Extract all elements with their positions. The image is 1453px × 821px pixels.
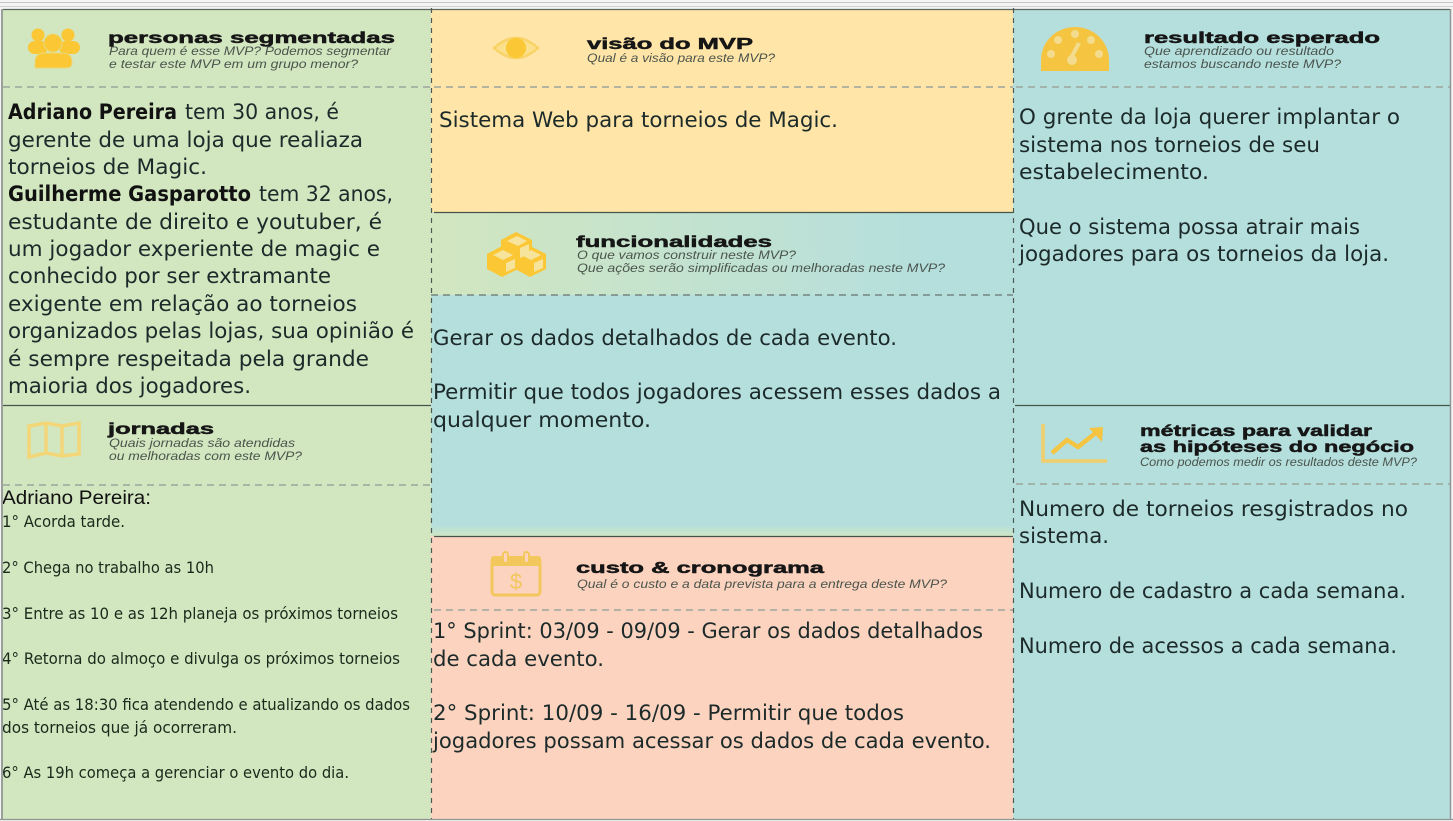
subtitle: resultado: [1144, 46, 1342, 71]
subtitle: resultado: estamos buscando neste MVP?: [1144, 59, 1342, 71]
text block: personas: Guilherme Gasparotto: [8, 182, 251, 206]
panel: personas segmentadas: [3, 9, 431, 405]
text block: personas: conhecido por ser extramante: [8, 264, 331, 288]
text block: personas: estudante de direito e youtuber, é: [8, 210, 382, 234]
text block: personas: organizados pelas lojas, sua opinião é: [8, 319, 414, 343]
subtitle: visão: Qual é a visão para este MVP?: [587, 53, 776, 65]
text block: sprints: [432, 619, 991, 753]
subtitle: funcionalidades: Que ações serão simplificadas ou melhoradas neste MVP?: [577, 263, 946, 275]
text block: resultado: estabelecimento.: [1019, 160, 1209, 184]
icon: eye: [494, 38, 538, 58]
text block: jornada de Adriano Pereira: 3° Entre as 10 e as 12h planeja os próximos torneios: [2, 604, 398, 623]
text block: sprints: 1° Sprint: 03/09 - 09/09 - Gerar os dados detalhados: [433, 619, 983, 643]
panel: custo e cronograma: [431, 536, 1013, 819]
text block: jornada de Adriano Pereira: 2° Chega no trabalho as 10h: [2, 558, 214, 577]
subtitle: jornadas: Quais jornadas são atendidas: [109, 438, 295, 450]
heading: custo e cronograma: custo & cronograma: [576, 560, 824, 577]
text block: resultado: Que o sistema possa atrair mais: [1019, 215, 1360, 239]
text block: funcionalidades: [433, 326, 1001, 432]
heading: resultado esperado: resultado esperado: [1144, 30, 1380, 47]
icon: people: [28, 28, 80, 68]
panel: resultado esperado: [1013, 9, 1450, 405]
subtitle: funcionalidades: [577, 250, 946, 275]
icon: calendar: $: [510, 569, 522, 594]
subtitle: funcionalidades: O que vamos construir neste MVP?: [577, 250, 797, 262]
text block: jornada de Adriano Pereira: 6° As 19h começa a gerenciar o evento do dia.: [2, 763, 349, 782]
text block: métricas: Numero de cadastro a cada semana.: [1019, 579, 1406, 603]
heading: métricas: as hipóteses do negócio: [1140, 439, 1414, 456]
panel: jornadas: [2, 405, 431, 819]
icon: line chart: [1043, 424, 1107, 461]
subtitle: personas: [109, 46, 392, 71]
text block: sprints: de cada evento.: [433, 647, 604, 671]
heading: jornadas: jornadas: [106, 421, 214, 438]
text block: personas: Adriano Pereira: [8, 100, 177, 124]
panel: funcionalidades: [431, 212, 1013, 536]
text block: personas: tem 30 anos, é: [185, 100, 339, 124]
subtitle: jornadas: [109, 438, 303, 463]
text block: personas: exigente em relação ao torneios: [8, 292, 357, 316]
icon: calendar: [491, 552, 541, 595]
text block: funcionalidades: Gerar os dados detalhados de cada evento.: [433, 326, 897, 350]
text block: sprints: 2° Sprint: 10/09 - 16/09 - Permitir que todos: [433, 701, 904, 725]
text block: métricas: Numero de torneios resgistrados no: [1019, 497, 1408, 521]
text block: personas: gerente de uma loja que realiaza: [8, 128, 363, 152]
text block: funcionalidades: qualquer momento.: [433, 408, 651, 432]
text block: personas: torneios de Magic.: [8, 155, 207, 179]
text block: personas: tem 32 anos,: [259, 182, 393, 206]
panel: métricas: [1013, 405, 1450, 819]
text block: métricas: Numero de acessos a cada semana.: [1019, 634, 1397, 658]
text block: visão: Sistema Web para torneios de Magic.: [439, 108, 838, 132]
text block: jornada de Adriano Pereira: [2, 487, 410, 782]
subtitle: resultado: Que aprendizado ou resultado: [1144, 46, 1335, 58]
heading: métricas: métricas para validar: [1140, 423, 1372, 440]
text block: sprints: jogadores possam acessar os dados de cada evento.: [432, 729, 991, 753]
text block: resultado: [1018, 105, 1400, 266]
text block: personas: é sempre respeitada pela grande: [8, 347, 369, 371]
text block: jornada de Adriano Pereira: 1° Acorda tarde.: [2, 512, 125, 531]
heading: visão do MVP: visão do MVP: [587, 36, 754, 53]
icon: gauge: [1041, 27, 1109, 71]
subtitle: métricas: Como podemos medir os resultados deste MVP?: [1140, 457, 1418, 469]
text block: personas: um jogador experiente de magic e: [8, 237, 380, 261]
panel: visão do MVP: [431, 9, 1013, 212]
text block: personas: [8, 100, 414, 398]
text block: jornada de Adriano Pereira: dos torneios que já ocorreram.: [2, 718, 237, 737]
heading: funcionalidades: funcionalidades: [576, 234, 772, 251]
text block: jornada de Adriano Pereira: 4° Retorna do almoço e divulga os próximos torneios: [2, 649, 400, 668]
text block: funcionalidades: Permitir que todos jogadores acessem esses dados a: [433, 380, 1001, 404]
heading: personas segmentadas: personas segmentadas: [108, 30, 395, 47]
subtitle: custo: Qual é o custo e a data prevista para a entrega deste MVP?: [577, 579, 948, 591]
text block: resultado: sistema nos torneios de seu: [1019, 133, 1320, 157]
text block: métricas: sistema.: [1019, 524, 1109, 548]
subtitle: personas: Para quem é esse MVP? Podemos segmentar: [109, 46, 392, 58]
text block: resultado: O grente da loja querer implantar o: [1019, 105, 1400, 129]
text block: jornada de Adriano Pereira: Adriano Pereira:: [2, 487, 151, 509]
icon: map: [29, 423, 79, 457]
subtitle: jornadas: ou melhoradas com este MVP?: [109, 451, 303, 463]
text block: jornada de Adriano Pereira: 5° Até as 18:30 fica atendendo e atualizando os dados: [2, 695, 410, 714]
text block: resultado: jogadores para os torneios da loja.: [1018, 242, 1389, 266]
text block: métricas: [1019, 497, 1408, 658]
subtitle: personas: e testar este MVP em um grupo menor?: [109, 59, 359, 71]
text block: personas: maioria dos jogadores.: [8, 374, 251, 398]
icon: cubes: [487, 232, 546, 277]
heading: métricas: [1140, 423, 1414, 456]
